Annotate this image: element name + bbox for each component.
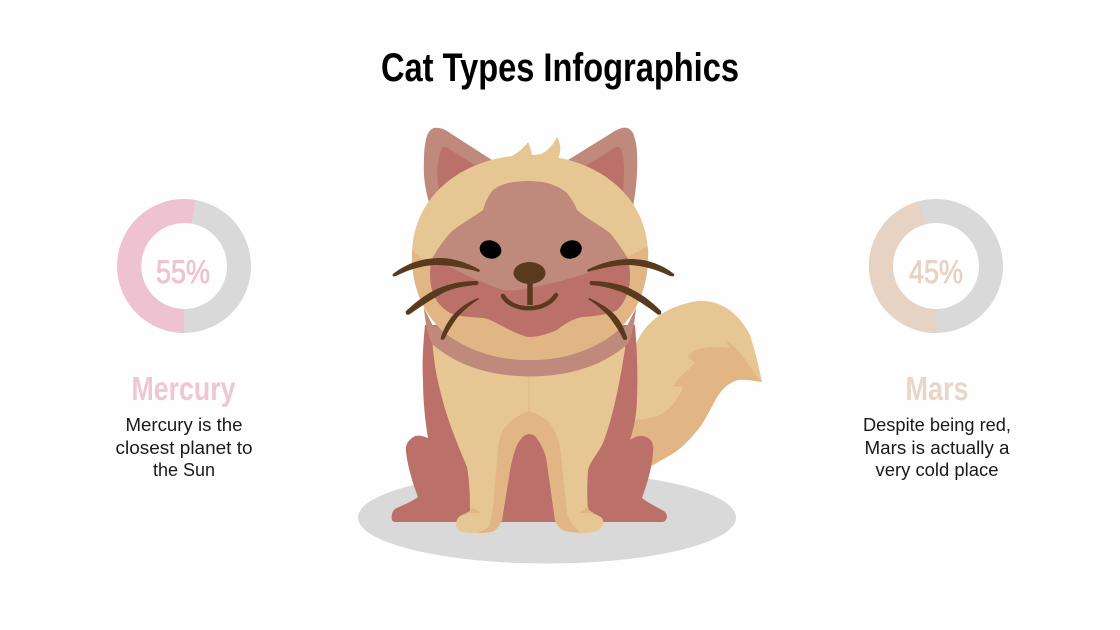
donut chart: 55% (129, 211, 239, 321)
paw details (466, 507, 594, 513)
text: Mercury description: the Sun (153, 460, 215, 480)
chest and front legs (432, 335, 627, 533)
collar (424, 308, 636, 376)
eyes (477, 238, 504, 261)
text: Mars description: very cold place (876, 460, 998, 480)
panel: Mercury (116, 211, 252, 480)
text: Mercury description: closest planet to (116, 438, 252, 458)
text: Mercury description (116, 415, 252, 480)
tail (625, 301, 762, 470)
muzzle mask (430, 250, 630, 337)
body back (392, 325, 667, 522)
text: Mars description: Mars is actually a (864, 438, 1011, 458)
inner leg shading (477, 411, 582, 533)
text: Mars description (863, 415, 1011, 480)
donut chart: 55%: 55% (156, 254, 210, 290)
tuft of fur (505, 137, 560, 162)
lower head shading (412, 246, 648, 360)
heading: Mars: Mars (906, 370, 968, 407)
ground shadow (358, 472, 736, 564)
heading: Mercury: Mercury (132, 370, 236, 407)
title: Cat Types Infographics (381, 46, 739, 90)
whiskers (393, 258, 674, 340)
panel: Mars (863, 211, 1011, 480)
donut chart: 45% (881, 211, 991, 321)
upper mask (433, 181, 627, 290)
illustration: cat (358, 128, 762, 564)
head (393, 155, 674, 360)
donut chart: 45%: 45% (909, 254, 963, 290)
text: Mercury description: Mercury is the (126, 415, 242, 435)
ears (424, 128, 637, 207)
nose and mouth (503, 262, 556, 308)
text: Mars description: Despite being red, (863, 415, 1011, 435)
